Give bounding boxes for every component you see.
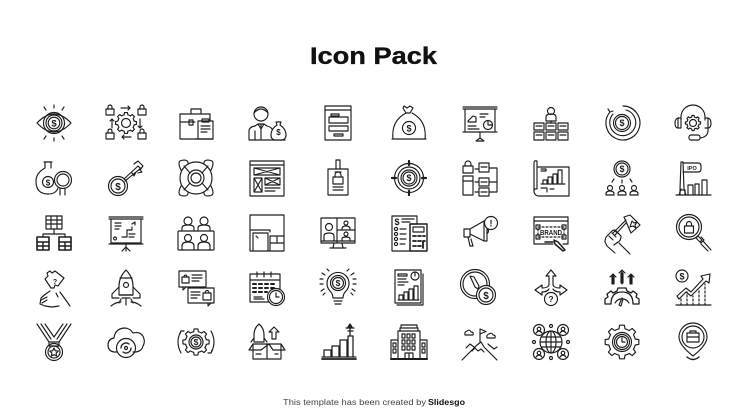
icon: calendar and clock	[250, 272, 284, 306]
icon: IPO flag and bars: IPO	[687, 166, 697, 172]
icon: eye with dollar: $	[51, 118, 57, 130]
icon: brand window with pen	[534, 217, 568, 251]
icon: rocket in box	[249, 324, 285, 359]
icon: location pin with briefcase	[679, 323, 707, 360]
icon: server network	[37, 216, 71, 250]
icon: businessman with money bag	[249, 107, 286, 140]
icon: three way arrows with question	[535, 270, 567, 306]
icon: coin with people: $	[619, 164, 625, 174]
icon: id badge	[328, 160, 348, 195]
icon: wireframe layout	[250, 161, 284, 196]
footer credit: This template has been created by	[283, 398, 426, 407]
icon: magnifier with lock	[676, 214, 711, 251]
icon: office building	[391, 325, 427, 359]
icon: invoice and calculator	[392, 216, 427, 251]
icon: brand window with pen: BRAND	[540, 228, 562, 237]
icon: growth chart with coin: $	[679, 271, 685, 281]
icon: IPO flag and bars	[676, 162, 711, 195]
icon: businessman with money bag: $	[276, 128, 281, 137]
icon: money bag with ring: $	[46, 178, 51, 188]
icon: idea bulb with dollar: $	[336, 278, 341, 288]
icon: blueprint bar chart	[534, 161, 569, 196]
icon: rocket launch	[111, 270, 141, 306]
icon: idea bulb with dollar	[320, 269, 356, 304]
icon: circular coin arrows: $	[619, 118, 625, 128]
icon: circular coin arrows	[606, 106, 640, 140]
icon: lifebuoy	[179, 160, 213, 196]
icon: chat bubbles	[179, 271, 214, 306]
icon: invoice and calculator: $	[394, 217, 400, 227]
icon: key with dollar	[108, 161, 143, 196]
icon: global network	[532, 324, 570, 360]
icon: target coin: $	[406, 173, 412, 183]
icon: compass and coin	[460, 270, 496, 304]
icon: cloud sync	[108, 328, 144, 358]
icon: target coin	[392, 161, 426, 195]
icon: gear coin with arrows: $	[194, 337, 199, 347]
icon: bars with flag trophy	[322, 324, 356, 359]
icon: hand holding flag	[605, 215, 640, 254]
icon: money bag: $	[406, 124, 412, 134]
icon: megaphone with alert	[464, 216, 498, 246]
icon: eye with dollar	[37, 105, 71, 141]
icon: medal with star	[37, 324, 71, 360]
icon: strategy board	[109, 217, 143, 251]
icon: mountain with flag and clouds	[462, 329, 497, 360]
footer credit: Slidesgo	[428, 398, 465, 407]
icon: headset	[675, 105, 711, 140]
icon: gear with locks and arrows	[106, 105, 146, 139]
icon: briefcase and document	[180, 109, 213, 139]
icon: hand with puzzle piece	[40, 271, 70, 307]
icon: key with dollar: $	[115, 182, 121, 193]
icon: gear with clock	[605, 325, 639, 359]
icon: hand with puzzle piece: ?	[53, 279, 57, 286]
icon: report document	[395, 270, 423, 305]
icon: meeting with four people	[178, 217, 214, 250]
icon: organisation chart	[534, 108, 568, 140]
icon: video call monitor	[321, 218, 355, 248]
icon: money bag	[392, 106, 426, 139]
icon: megaphone with alert: !	[490, 218, 492, 228]
icon: compass and coin: $	[483, 291, 489, 302]
icon: presentation board	[463, 107, 497, 141]
title: Icon Pack	[310, 43, 438, 70]
icon: room floor plan	[250, 215, 284, 251]
icon: coin with people	[606, 161, 638, 195]
icon: growth chart with coin	[676, 270, 711, 305]
icon: process flow with lock	[463, 161, 497, 196]
icon: login window	[325, 106, 351, 140]
icon: three way arrows with question: ?	[548, 294, 554, 304]
icon: money bag with ring	[36, 162, 72, 195]
icon: gear coin with arrows	[178, 329, 214, 355]
icon: gauge gear with arrows	[605, 270, 639, 306]
